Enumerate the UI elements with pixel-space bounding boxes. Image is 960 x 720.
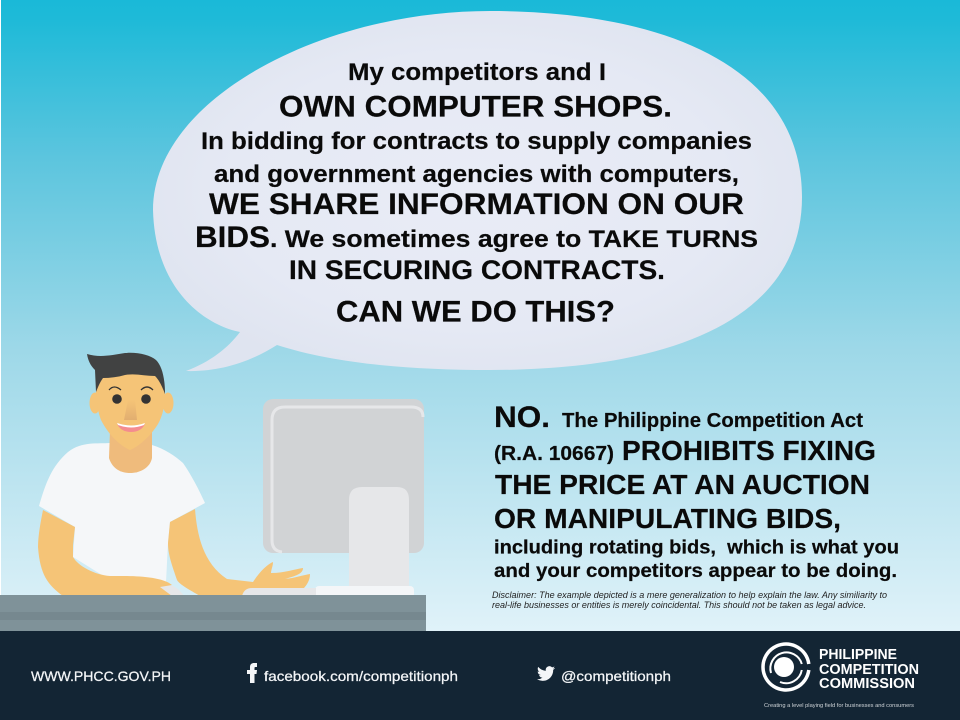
man: ears bbox=[90, 392, 100, 414]
mouse bbox=[158, 585, 184, 596]
question text: BIDS bbox=[195, 221, 270, 254]
question text: OWN COMPUTER SHOPS. bbox=[279, 90, 672, 124]
man: eyes and brows bbox=[112, 394, 122, 404]
logo bbox=[763, 644, 919, 709]
man at desk bbox=[38, 353, 310, 596]
man: t-shirt bbox=[39, 443, 205, 582]
man: nose bbox=[124, 400, 137, 420]
answer text: including rotating bids, which is what you bbox=[494, 538, 899, 558]
speech bubble bbox=[153, 11, 802, 371]
man: neck bbox=[109, 430, 152, 473]
question text: In bidding for contracts to supply companies bbox=[201, 128, 752, 155]
keyboard bbox=[242, 588, 316, 596]
question text bbox=[195, 59, 758, 328]
twitter handle: @competitionph bbox=[561, 668, 671, 684]
computer monitor bbox=[263, 399, 424, 598]
man: right arm and hand bbox=[168, 509, 310, 596]
answer text: and your competitors appear to be doing. bbox=[494, 561, 897, 582]
desk bbox=[0, 595, 426, 631]
facebook handle: facebook.com/competitionph bbox=[264, 668, 458, 684]
question text: My competitors and I bbox=[348, 59, 606, 86]
man: face bbox=[96, 372, 165, 450]
question text: IN SECURING CONTRACTS. bbox=[289, 255, 665, 285]
icon: twitter bbox=[537, 666, 555, 681]
question text: CAN WE DO THIS? bbox=[336, 296, 615, 328]
man: hair bbox=[87, 353, 165, 394]
logo: COMMISSION bbox=[819, 676, 915, 692]
answer text: PROHIBITS FIXING bbox=[622, 435, 876, 466]
answer text: (R.A. 10667) bbox=[494, 443, 614, 465]
man: left arm bbox=[38, 510, 172, 596]
answer text: OR MANIPULATING BIDS, bbox=[494, 503, 841, 534]
website link: WWW.PHCC.GOV.PH bbox=[31, 668, 171, 684]
answer text: THE PRICE AT AN AUCTION bbox=[495, 469, 870, 500]
disclaimer: Disclaimer: The example depicted is a mere generalization to help explain the law. Any similiarity to bbox=[492, 590, 887, 600]
logo tagline: Creating a level playing field for businesses and consumers bbox=[764, 703, 914, 709]
footer bar bbox=[0, 631, 960, 720]
icon: facebook bbox=[247, 663, 257, 683]
logo wordmark: PHILIPPINE bbox=[819, 647, 897, 663]
disclaimer: real-life businesses or entities is merely coincidental. This should not be taken as legal advice. bbox=[492, 600, 866, 610]
disclaimer bbox=[492, 590, 887, 610]
question text: and government agencies with computers, bbox=[214, 161, 739, 188]
answer text: NO. bbox=[494, 401, 550, 434]
question text: WE SHARE INFORMATION ON OUR bbox=[209, 188, 744, 221]
question text: . We sometimes agree to TAKE TURNS bbox=[270, 226, 758, 253]
logo: COMPETITION bbox=[819, 662, 919, 678]
answer text: The Philippine Competition Act bbox=[562, 410, 863, 432]
answer text bbox=[494, 401, 899, 582]
logo mark bbox=[763, 644, 809, 690]
man: mouth bbox=[117, 424, 145, 432]
